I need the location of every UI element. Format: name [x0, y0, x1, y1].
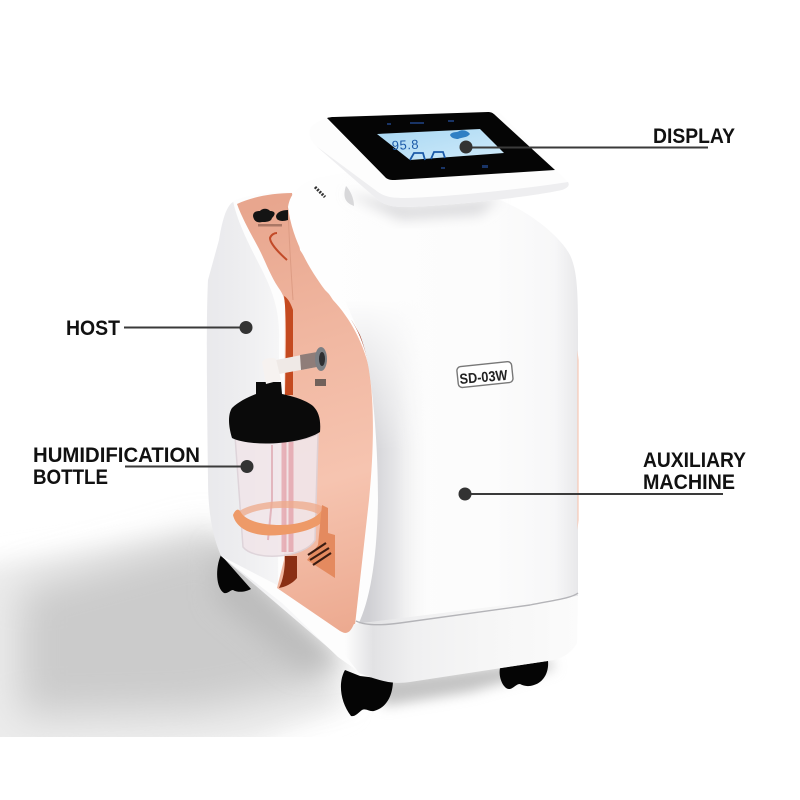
bottle cap — [229, 382, 320, 444]
label: host: HOST — [66, 317, 120, 340]
holder ring back — [238, 501, 325, 516]
bezel shadow — [345, 193, 500, 220]
black glass — [327, 112, 555, 180]
holder ring — [233, 508, 327, 536]
label: humidification bottle: HUMIDIFICATION — [33, 444, 200, 467]
wheel: rear left — [217, 555, 251, 593]
model badge: SD-03W — [459, 368, 508, 388]
vent slots — [308, 543, 331, 565]
bezel — [309, 110, 568, 207]
floor shadow — [0, 530, 555, 770]
label: display — [460, 125, 735, 154]
humidification bottle — [229, 382, 335, 578]
LCD readout lower — [410, 152, 445, 160]
LCD screen — [377, 129, 504, 160]
panel crease — [288, 207, 293, 300]
bezel lower edge — [316, 146, 569, 207]
slot curve — [270, 233, 287, 260]
wheel: front right — [500, 661, 548, 689]
auxiliary machine body — [288, 172, 579, 683]
bottle jar — [235, 434, 318, 556]
label: humidification bottle: BOTTLE — [33, 466, 108, 489]
label: humidification bottle — [33, 444, 254, 489]
dark red groove upper — [284, 296, 293, 395]
label: auxiliary machine — [458, 449, 746, 500]
outlet caption — [258, 224, 282, 226]
label: host — [66, 317, 252, 340]
caster wheels — [217, 555, 548, 716]
dip tube — [284, 442, 291, 552]
groove lower — [279, 556, 297, 588]
outlet tube — [262, 347, 327, 386]
lower white sweep — [221, 556, 362, 674]
label: auxiliary machine: AUXILIARY — [643, 449, 746, 472]
holder bracket — [307, 505, 335, 578]
display head — [309, 110, 569, 220]
top vent dots — [315, 187, 325, 197]
LCD cloud icon — [450, 130, 470, 139]
peach side panel — [237, 193, 377, 633]
infographic: oxygen concentrator with labelled parts — [0, 112, 746, 737]
twin outlet right — [276, 210, 288, 221]
LCD readout: 95.8 — [391, 137, 419, 153]
touch keys — [387, 120, 488, 169]
hinge recess — [344, 186, 354, 206]
panel outer edge — [352, 320, 377, 632]
panel shading beside peach edge — [357, 326, 411, 624]
host unit body — [207, 195, 360, 662]
label: auxiliary machine: MACHINE — [643, 471, 735, 494]
twin outlet left — [253, 209, 275, 222]
host rim white band — [233, 192, 300, 590]
right peach sliver — [577, 350, 579, 530]
label: display: DISPLAY — [653, 125, 735, 148]
wheel: front left — [341, 670, 393, 716]
base seam — [356, 593, 578, 625]
base plinth — [345, 596, 578, 683]
